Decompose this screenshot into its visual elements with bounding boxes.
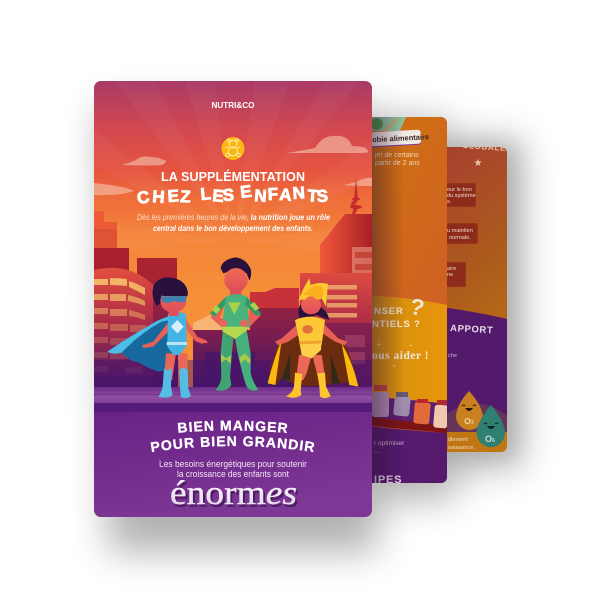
- subheading: [159, 459, 307, 479]
- callout: immune system: [447, 183, 476, 207]
- purple shelf: [372, 398, 447, 433]
- callout: third benefit: [447, 262, 466, 288]
- character: yellow hero: [268, 278, 358, 398]
- building: left block behind hero: [153, 280, 178, 388]
- label: diversification alimentaire: [372, 130, 429, 148]
- text block: jet de certains: [374, 152, 419, 159]
- face: [160, 289, 186, 313]
- callout: maintenance: normale.: [449, 235, 471, 241]
- icon: omega 3 drop: [456, 391, 483, 430]
- bottom haze: [94, 360, 372, 388]
- heading: bien manger: BIEN MANGER: [178, 420, 288, 434]
- legs: [164, 353, 188, 380]
- purple footer: [372, 426, 447, 483]
- arms: [211, 307, 227, 327]
- callout: third benefit: ne: [447, 272, 453, 278]
- text block: partir de 2 ans: [375, 160, 420, 167]
- character: green hero: [210, 257, 262, 391]
- clouds: [94, 136, 372, 195]
- belt and briefs: [167, 342, 187, 355]
- face: [224, 268, 248, 292]
- highlight word: énormes: énorm es: [170, 475, 297, 512]
- title: LA SUPPLÉMENTATION: [161, 169, 305, 184]
- torso: [295, 317, 325, 345]
- sleeves: [210, 297, 262, 317]
- mask: [161, 296, 187, 303]
- text block: che: [448, 353, 457, 359]
- mid ground blocks: [193, 288, 300, 390]
- character: blue hero: [107, 277, 208, 398]
- legs: [296, 355, 325, 380]
- heading: recipes: IPES: [374, 474, 402, 486]
- heading: apport: APPORT: [450, 323, 494, 336]
- icon: salad bowl: [368, 117, 406, 131]
- heading: bien manger: POUR BIEN GRANDIR: [150, 436, 314, 452]
- building: left rounded tower: [94, 268, 153, 388]
- subheading: Les besoins énergétiques pour soutenir: [159, 459, 307, 469]
- legs: [215, 332, 233, 391]
- callout: immune system: s.: [447, 199, 452, 205]
- text block: dlement: [448, 437, 468, 443]
- callout: third benefit: aire: [447, 266, 456, 272]
- sparkles: +: [377, 340, 382, 349]
- text block: r optimiser: [374, 440, 405, 447]
- drop shadows: [100, 105, 522, 552]
- cape: [107, 314, 186, 372]
- icon: supplement bottles: [372, 385, 449, 429]
- city skyline: [94, 178, 372, 393]
- emblem: [171, 320, 184, 333]
- shade cast by the front card: [372, 117, 404, 483]
- purple panel: [447, 308, 507, 432]
- boots: [286, 373, 302, 398]
- intro paragraph: [137, 214, 330, 232]
- emblem: [302, 325, 313, 334]
- heading: essentiels: NSER: [374, 306, 404, 317]
- callout: maintenance: [447, 223, 478, 244]
- icon: question mark: ?: [408, 293, 427, 321]
- icon: omega 6 drop: [476, 405, 505, 447]
- torso: [167, 312, 187, 343]
- icon: omega 3 drop: O3: [464, 416, 474, 426]
- shorts: [222, 327, 247, 339]
- text block: naissance,: [448, 445, 475, 451]
- title: hand-lettered line: CHEZ LES ENFANTS: [136, 182, 329, 208]
- text block: ...: [374, 448, 380, 455]
- belt and briefs: [299, 340, 322, 358]
- sun rays: [94, 81, 372, 260]
- brand: Nutri&Co: NUTRI&CO: [212, 100, 255, 110]
- neck: [230, 288, 241, 298]
- emblem: [228, 302, 241, 315]
- rooftop ground: [94, 387, 372, 412]
- panel: purple footer: [94, 412, 372, 517]
- building: left stepped towers: [94, 211, 180, 285]
- highlight word: énormes: énorm es: [172, 478, 299, 514]
- building: right spire tower: [320, 179, 372, 273]
- sparkles: +: [410, 343, 413, 349]
- panel: middle card, food diversification: [372, 117, 447, 483]
- torso: [222, 294, 249, 327]
- sparkles: +: [392, 364, 396, 370]
- callout: maintenance: u maintien: [447, 228, 473, 234]
- cape: [268, 327, 358, 387]
- panel: front card: [94, 81, 372, 517]
- hands: [220, 320, 227, 327]
- heading: vous aider: ous aider !: [372, 350, 429, 362]
- hair: [153, 277, 188, 306]
- heading: essentiels: NTIELS ?: [372, 319, 421, 330]
- crown hair: [298, 278, 328, 307]
- halo: [447, 403, 507, 432]
- intro paragraph: Dès les premières heures de la vie, la nutrition joue un rôle: [137, 212, 330, 222]
- intro paragraph: central dans le bon développement des enfants.: [153, 223, 313, 233]
- arms: [275, 323, 303, 345]
- icon: teddy bear badge: [222, 137, 244, 160]
- title: [137, 170, 328, 204]
- label: diversification alimentaire: obie alimentaire: [372, 132, 429, 144]
- yellow panel: [372, 296, 447, 403]
- panel: back card, omega 3 and 6: [447, 147, 507, 452]
- heading: bien manger: [150, 420, 314, 452]
- face: [301, 296, 321, 314]
- arms: [183, 319, 208, 344]
- sparkles: [377, 342, 412, 368]
- building: right block: [300, 273, 372, 393]
- hair: [298, 305, 329, 320]
- callout: immune system: our le bon: [447, 187, 472, 193]
- hair: [221, 257, 251, 281]
- icon: omega 6 drop: O6: [485, 434, 495, 444]
- icon: star: ★: [474, 158, 483, 169]
- heading: globale: GLOBALE: [462, 141, 506, 153]
- subheading: la croissance des enfants sont: [177, 469, 290, 479]
- hero characters: [107, 257, 358, 398]
- callout: immune system: du système: [447, 193, 476, 199]
- boots: [158, 367, 173, 398]
